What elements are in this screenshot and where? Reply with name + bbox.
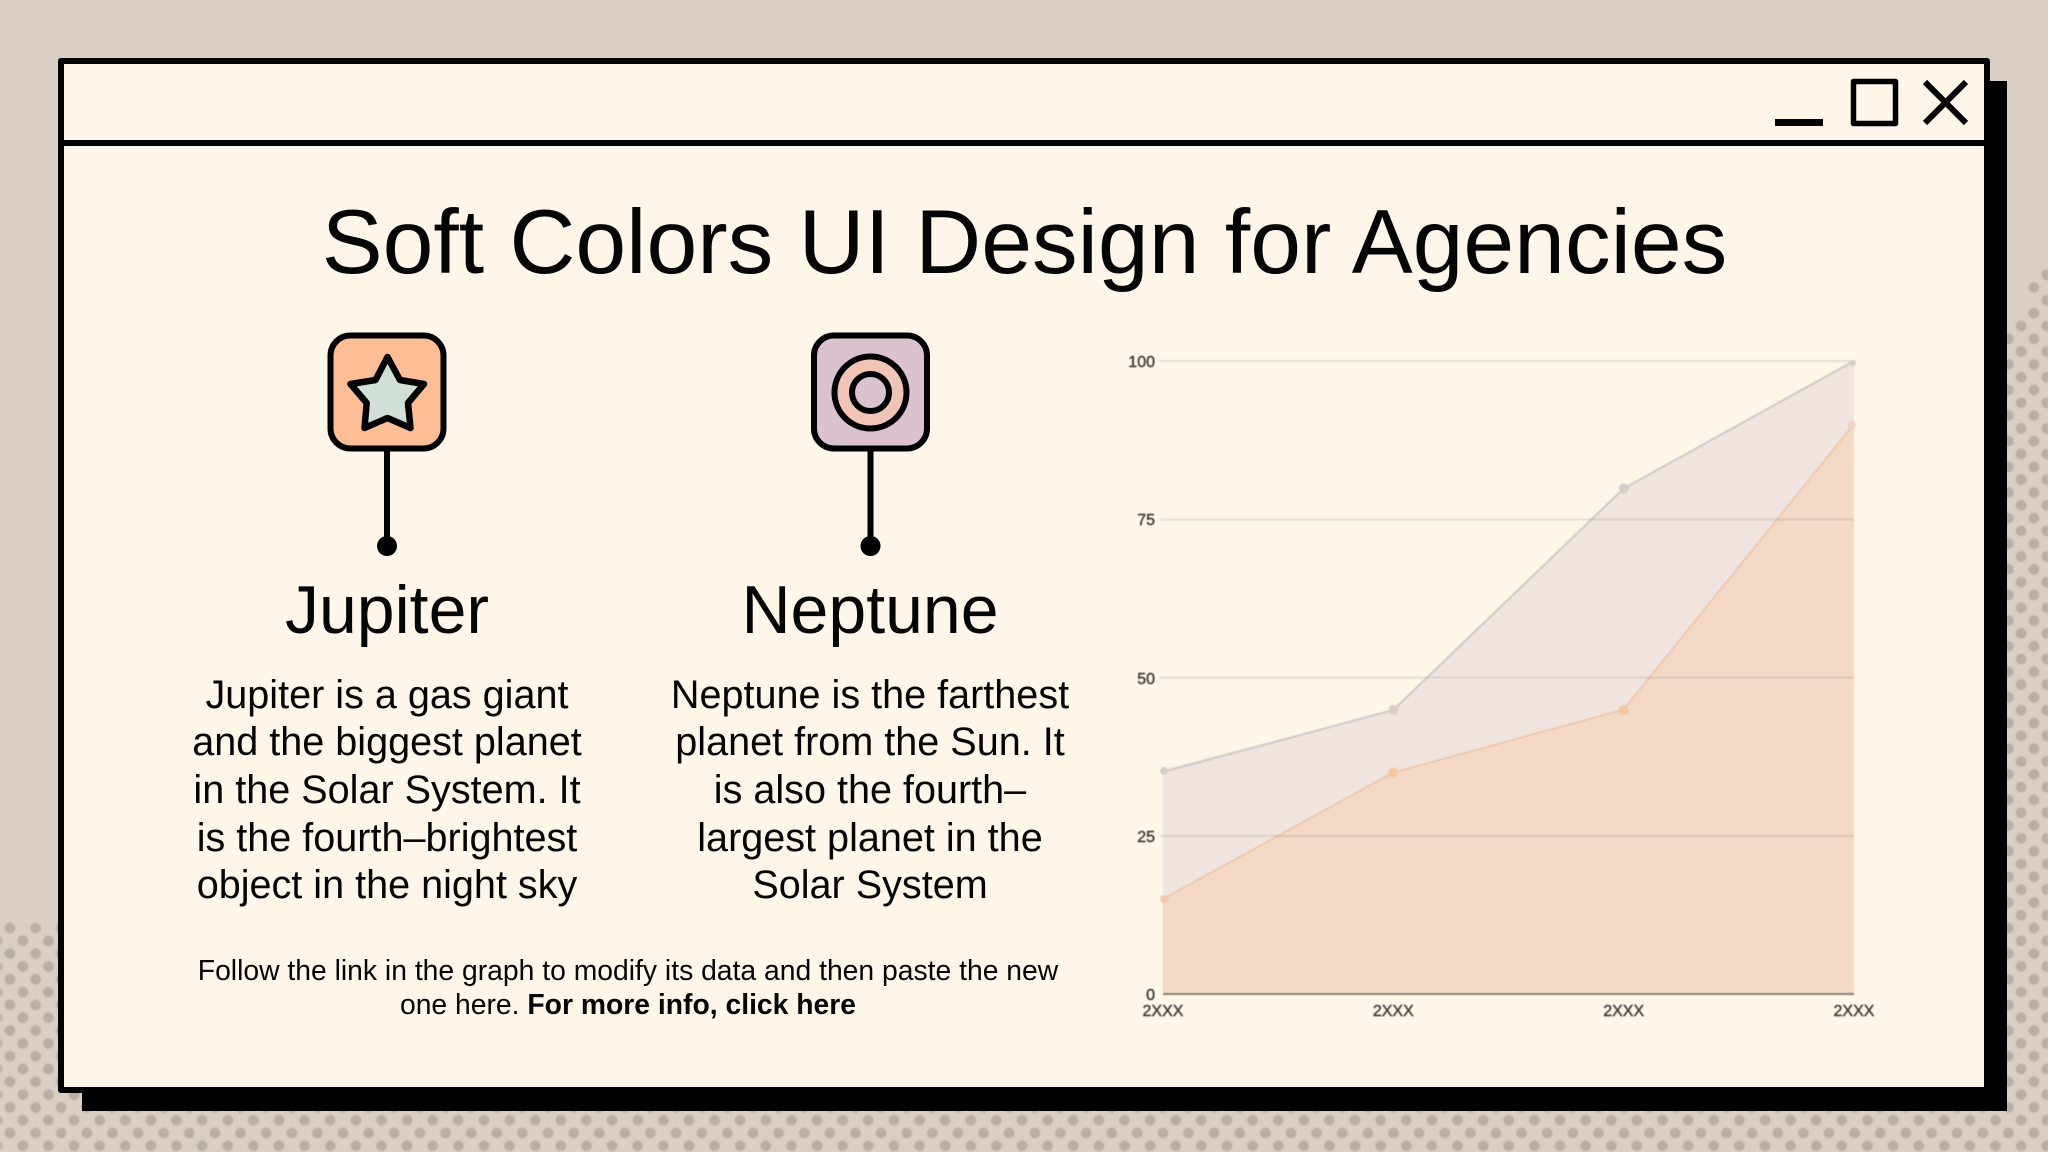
icon: close <box>1925 82 1966 123</box>
text: Neptune description: is also the fourth– <box>714 768 1026 812</box>
icon: maximize <box>1854 82 1896 124</box>
text: Jupiter description: and the biggest planet <box>192 720 582 764</box>
text: Neptune description: largest planet in the <box>697 816 1043 860</box>
x axis labels: 2XXX <box>1143 1003 1184 1020</box>
x axis labels: 2XXX <box>1603 1003 1644 1020</box>
y axis labels: 75 <box>1137 512 1155 529</box>
title: Soft Colors UI Design for Agencies <box>322 191 1727 293</box>
text: footnote with link <box>198 954 1058 1020</box>
x axis labels <box>1143 1003 1875 1020</box>
text: Neptune description: planet from the Sun. It <box>675 720 1065 764</box>
upper series area <box>1163 361 1854 994</box>
heading: Neptune: Neptune <box>741 572 999 648</box>
panel: Neptune <box>671 332 1069 907</box>
text: Neptune description <box>671 672 1069 907</box>
text: Neptune description: Solar System <box>752 863 988 907</box>
y axis labels: 25 <box>1137 829 1155 846</box>
area chart <box>1128 354 1875 1020</box>
y axis labels: 100 <box>1128 354 1155 371</box>
panel: Jupiter <box>192 332 582 907</box>
x axis labels: 2XXX <box>1373 1003 1414 1020</box>
text: Jupiter description <box>192 672 582 907</box>
heading: Jupiter: Jupiter <box>285 572 489 648</box>
text: footnote with link: one here. For more info, click here <box>400 988 856 1020</box>
icon: star pin <box>328 332 446 556</box>
y axis labels: 0 <box>1146 987 1155 1004</box>
text: Jupiter description: object in the night sky <box>197 863 577 907</box>
upper series markers <box>1160 360 1856 775</box>
lower series area <box>1163 424 1854 994</box>
text: Jupiter description: is the fourth–brightest <box>197 816 577 860</box>
icon: minimize <box>1775 119 1823 126</box>
y axis labels: 50 <box>1137 671 1155 688</box>
text: Jupiter description: Jupiter is a gas giant <box>205 672 568 716</box>
y axis labels <box>1128 354 1155 1004</box>
text: Jupiter description: in the Solar System. It <box>193 768 581 812</box>
x axis labels: 2XXX <box>1834 1003 1875 1020</box>
icon: target pin <box>811 332 930 556</box>
window controls <box>1775 78 1968 126</box>
gridlines <box>1160 361 1854 836</box>
x axis <box>1163 993 1854 995</box>
title bar divider <box>64 140 1984 146</box>
text: Neptune description: Neptune is the farthest <box>671 672 1069 716</box>
lower series markers <box>1160 421 1856 903</box>
text: footnote with link: Follow the link in the graph to modify its data and then paste the new <box>198 954 1058 986</box>
